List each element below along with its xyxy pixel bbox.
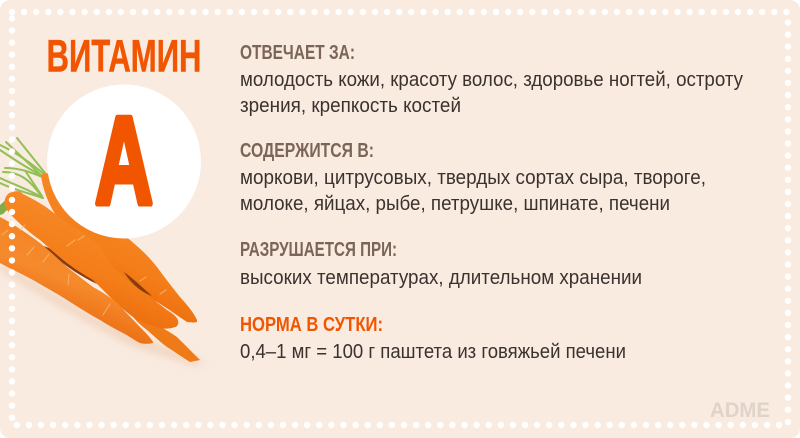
section: destroyed by bbox=[240, 239, 642, 289]
carrot: thin tip bbox=[128, 310, 200, 362]
carrot greens bbox=[0, 138, 45, 212]
body text: молодость кожи, красоту волос, здоровье ногтей, остроту bbox=[240, 69, 743, 91]
title: ВИТАМИН bbox=[46, 30, 202, 82]
carrot: front bbox=[0, 217, 153, 344]
section: daily norm bbox=[240, 314, 626, 363]
carrot highlights bbox=[2, 225, 166, 315]
body text: моркови, цитрусовых, твердых сортах сыра, твороге, bbox=[240, 167, 706, 189]
heading: ОТВЕЧАЕТ ЗА: bbox=[240, 42, 355, 64]
carrot: middle bbox=[5, 191, 178, 329]
section: contained in bbox=[240, 140, 706, 215]
carrot gap shadow bbox=[44, 246, 152, 296]
carrot shadow bbox=[0, 262, 205, 366]
white circle bbox=[47, 84, 201, 238]
heading: СОДЕРЖИТСЯ В: bbox=[240, 140, 374, 162]
section: responsible for bbox=[240, 42, 743, 117]
letter A: А bbox=[95, 92, 153, 230]
body text line 2: молоке, яйцах, рыбе, петрушке, шпинате, печени bbox=[240, 193, 670, 215]
watermark: ADME bbox=[710, 399, 770, 422]
body text: 0,4–1 мг = 100 г паштета из говяжьей печени bbox=[240, 341, 626, 363]
body text line 2: зрения, крепкость костей bbox=[240, 95, 461, 117]
heading: РАЗРУШАЕТСЯ ПРИ: bbox=[240, 239, 397, 261]
carrot greens clump bbox=[0, 197, 12, 215]
heading: НОРМА В СУТКИ: bbox=[240, 314, 383, 336]
carrot: back bbox=[41, 173, 197, 322]
carrots illustration bbox=[0, 138, 205, 366]
body text: высоких температурах, длительном хранении bbox=[240, 267, 642, 289]
